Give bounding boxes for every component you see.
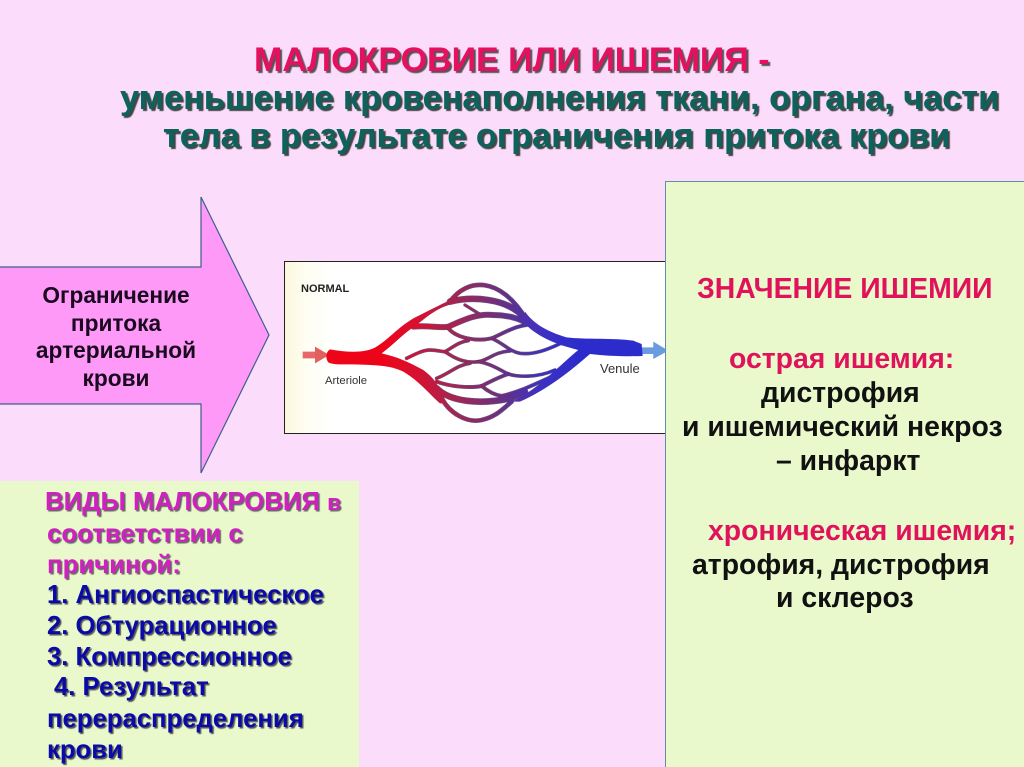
subtitle line 1: уменьшение кровенаполнения ткани, органа, части	[120, 79, 999, 117]
arrow label: притока	[71, 310, 161, 336]
arteriole trunk	[326, 299, 450, 403]
heading: significance: ЗНАЧЕНИЕ ИШЕМИИ	[697, 273, 993, 305]
outflow arrow	[639, 341, 668, 358]
venule trunk	[511, 311, 642, 401]
label: Arteriole: Arteriole	[324, 374, 367, 386]
title block	[120, 41, 1000, 157]
heading: types: ВИДЫ МАЛОКРОВИЯ в	[45, 488, 341, 516]
list item 4 line 2: перераспределения	[47, 705, 304, 733]
panel: significance of ischemia	[665, 181, 1024, 767]
list item 4 line 3: крови	[47, 736, 123, 764]
text: chronic outcome 2: и склероз	[776, 582, 914, 614]
text: chronic outcome 1: атрофия, дистрофия	[692, 549, 990, 581]
list item 1: 1. Ангиоспастическое	[47, 581, 324, 609]
list item 2: 2. Обтурационное	[47, 612, 277, 640]
arrow label	[36, 282, 196, 391]
heading: main title: МАЛОКРОВИЕ ИЛИ ИШЕМИЯ -	[254, 41, 770, 79]
text: acute outcome 2: и ишемический некроз	[682, 411, 1003, 443]
arrow label: Ограничение	[42, 282, 190, 308]
subtitle line 2: тела в результате ограничения притока крови	[163, 117, 950, 155]
list item 3: 3. Компрессионное	[47, 643, 292, 671]
text: acute outcome 3: – инфаркт	[776, 445, 920, 477]
heading continuation: соответствии с	[47, 520, 243, 548]
heading continuation 2: причиной:	[47, 551, 181, 579]
label: NORMAL: NORMAL	[300, 282, 349, 294]
arrow label: крови	[83, 364, 149, 390]
label: Venule: Venule	[600, 360, 639, 376]
subheading: chronic: хроническая ишемия;	[708, 515, 1016, 547]
arrow label: артериальной	[36, 337, 196, 363]
arrow: restricted arterial inflow	[0, 196, 270, 474]
list item 4: 4. Результат	[54, 673, 209, 701]
capillary network	[406, 284, 559, 420]
subheading: acute: острая ишемия:	[729, 343, 954, 375]
inflow arrow	[302, 346, 329, 363]
panel: types of anemia	[0, 481, 359, 767]
diagram: normal capillary bed	[284, 261, 666, 434]
text: acute outcome 1: дистрофия	[761, 377, 920, 409]
